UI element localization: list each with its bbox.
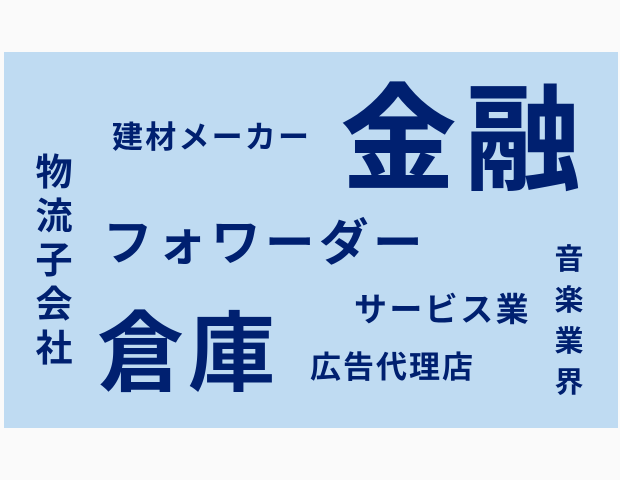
word: 音楽業界 (vertical): 業	[554, 326, 584, 358]
word: 物流子会社 (vertical): 物	[36, 152, 72, 193]
word: サービス業: サービス業	[354, 291, 531, 328]
panel: word cloud background	[4, 52, 618, 428]
word: 広告代理店: 広告代理店	[310, 350, 475, 385]
word: 音楽業界 (vertical): 楽	[554, 285, 584, 317]
word: 物流子会社 (vertical): 社	[36, 328, 72, 369]
word: 金融: 金融	[341, 77, 589, 205]
word: 物流子会社 (vertical)	[36, 152, 72, 369]
word: 音楽業界 (vertical)	[554, 244, 584, 399]
word: 建材メーカー: 建材メーカー	[112, 120, 311, 155]
word: 物流子会社 (vertical): 子	[36, 240, 72, 281]
word: 音楽業界 (vertical): 音	[554, 244, 584, 276]
word: フォワーダー: フォワーダー	[103, 216, 427, 271]
word: 物流子会社 (vertical): 流	[36, 196, 72, 237]
word: 音楽業界 (vertical): 界	[554, 367, 584, 399]
word: 倉庫: 倉庫	[97, 306, 279, 403]
word: 物流子会社 (vertical): 会	[36, 284, 72, 325]
